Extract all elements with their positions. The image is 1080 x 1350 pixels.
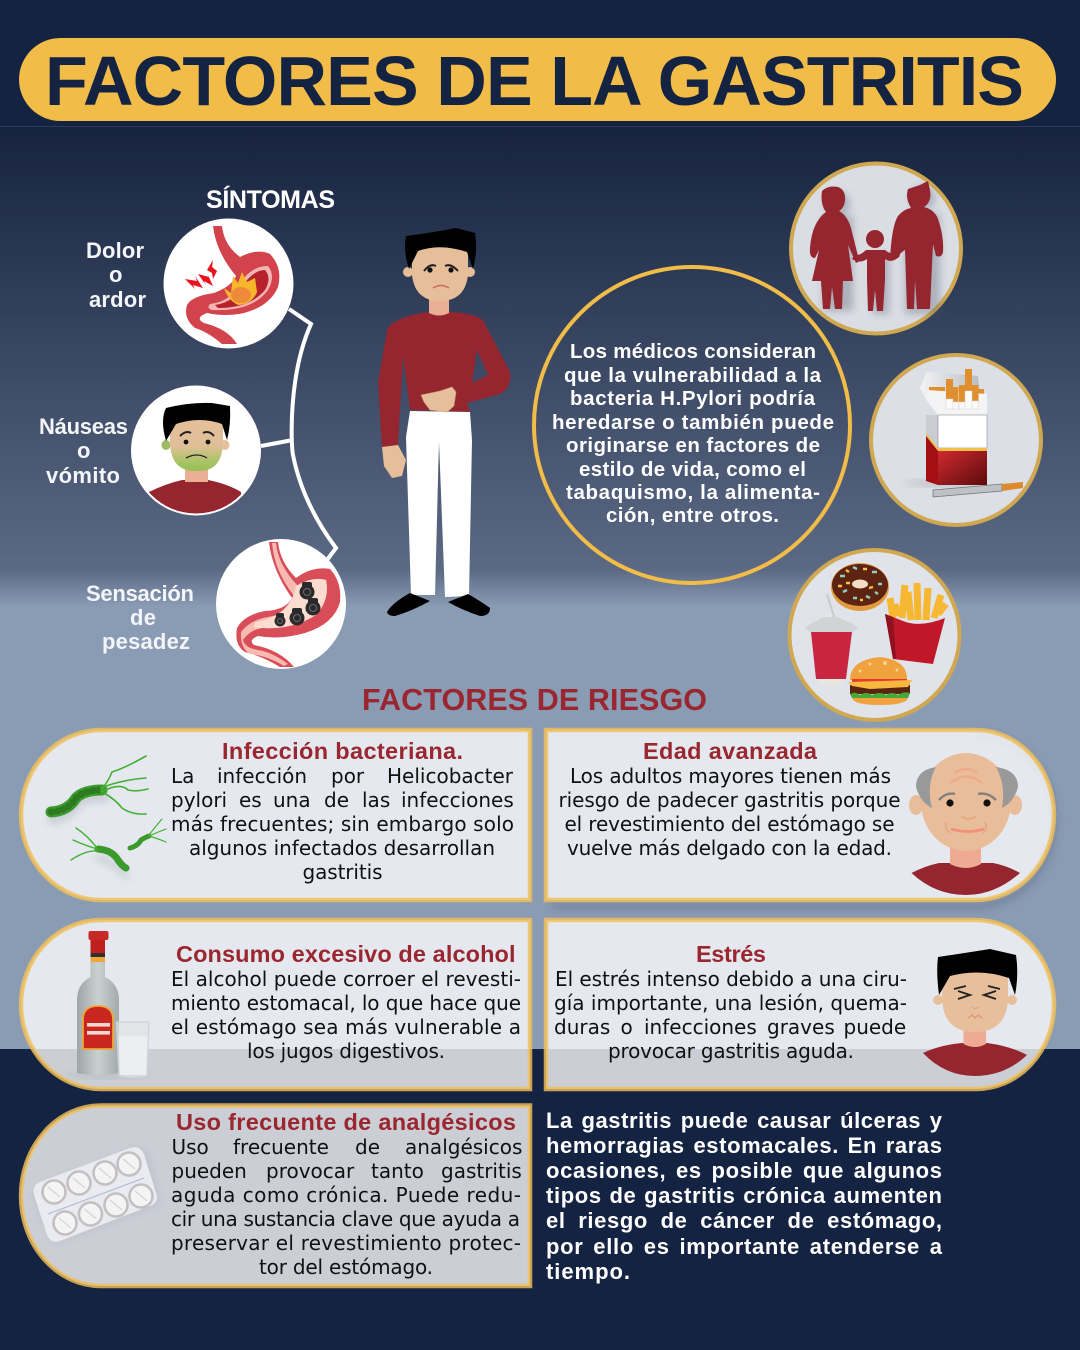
label: náuseas o vómito [39, 414, 128, 488]
text circle: explanation: bacteria H.Pylori podría [570, 387, 816, 410]
symptom: dolor o ardor [86, 218, 294, 348]
text block: de [355, 1135, 380, 1159]
panel: edad avanzada [546, 730, 1054, 900]
heading: Infección bacteriana. [222, 738, 463, 764]
text circle: explanation: ción, entre otros. [606, 504, 779, 527]
icon: family [791, 164, 961, 334]
text block: Los adultos mayores tienen más [570, 764, 891, 788]
label: sensación de pesadez: pesadez [102, 629, 190, 654]
text block: infecciones [401, 788, 514, 812]
panel: uso frecuente de analgésicos [21, 1106, 530, 1286]
icon: nauseous man [131, 386, 261, 516]
text block: puede [844, 1015, 906, 1039]
icon: junk food [790, 550, 960, 720]
text block: o [620, 1015, 633, 1039]
text block: riesgo de padecer gastritis porque [558, 788, 900, 812]
text block: el estómago sea más vulnerable a [171, 1015, 521, 1039]
label: náuseas o vómito: Náuseas [39, 414, 128, 439]
text block: Helicobacter [387, 764, 514, 788]
text block: algunos infectados desarrollan [189, 836, 495, 860]
text block: consequences: ocasiones, es posible que algunos [546, 1158, 942, 1183]
text circle: explanation: Los médicos consideran [570, 340, 816, 363]
text block: consequences: hemorragias estomacales. En raras [546, 1133, 942, 1158]
text block: graves [767, 1015, 835, 1039]
text block: provocar gastritis aguda. [608, 1039, 854, 1063]
panel: infección bacteriana [21, 730, 530, 900]
heading: Consumo excesivo de alcohol [176, 941, 516, 967]
text block: tanto [371, 1159, 424, 1183]
heading: Estrés [696, 941, 766, 967]
label: náuseas o vómito: vómito [46, 463, 120, 488]
text circle: explanation [534, 267, 850, 583]
text block: provocar [266, 1159, 355, 1183]
symptom: sensación de pesadez [86, 539, 346, 669]
text circle: explanation: que la vulnerabilidad a la [564, 364, 822, 387]
icon: bacteria [51, 756, 166, 876]
text block: una [273, 788, 311, 812]
label: dolor o ardor: Dolor [86, 238, 144, 263]
label: dolor o ardor [86, 238, 146, 312]
label: sensación de pesadez: de [130, 605, 156, 630]
text block: analgésicos [405, 1135, 522, 1159]
text block: las [362, 788, 390, 812]
heading: Edad avanzada [643, 738, 818, 764]
label: sensación de pesadez [86, 581, 194, 654]
text block: de [324, 788, 349, 812]
text block: infecciones [644, 1015, 757, 1039]
text block: los jugos digestivos. [247, 1039, 445, 1063]
text block: consequences: por ello es importante atenderse a [546, 1234, 943, 1259]
text block: consequences: el riesgo de cáncer de estómago, [546, 1208, 942, 1233]
heading: Uso frecuente de analgésicos [176, 1109, 516, 1135]
panel: consumo excesivo de alcohol [21, 920, 530, 1089]
text block: vuelve más delgado con la edad. [567, 836, 892, 860]
text block: preservar el revestimiento protec- [171, 1231, 521, 1255]
icon: cigarettes [871, 355, 1041, 525]
title banner: FACTORES DE LA GASTRITIS [45, 42, 1024, 120]
text block: cir una sustancia clave que ayuda a [171, 1207, 520, 1231]
text block: miento estomacal, lo que hace que [171, 991, 521, 1015]
text block: El estrés intenso debido a una ciru- [555, 967, 907, 991]
icon: pills [34, 1147, 158, 1242]
text block: duras [554, 1015, 610, 1039]
text block: consequences: tiempo. [546, 1259, 630, 1284]
text circle: explanation: originarse en factores de [566, 434, 820, 457]
text block: pylori [171, 788, 227, 812]
text circle: explanation: heredarse o también puede [552, 411, 834, 434]
text circle: explanation: estilo de vida, como el [579, 458, 806, 481]
text block: infección [217, 764, 307, 788]
symptom: náuseas o vómito [39, 386, 261, 516]
heading: factores de riesgo: FACTORES DE RIESGO [362, 683, 707, 717]
text block: gastritis [302, 860, 382, 884]
icon: burning stomach [164, 218, 294, 348]
text block: más frecuentes; sin embargo solo [171, 812, 514, 836]
text block: frecuente [233, 1135, 329, 1159]
panel: estrés [546, 920, 1054, 1089]
text block [554, 967, 907, 1063]
text block: el revestimiento del estómago se [564, 812, 894, 836]
text block: La [171, 764, 194, 788]
text block: tor del estómago. [259, 1255, 433, 1279]
text block: consequences [546, 1108, 943, 1284]
text block: gía importante, una lesión, quema- [554, 991, 907, 1015]
heading: síntomas: SÍNTOMAS [206, 185, 335, 214]
label: sensación de pesadez: Sensación [86, 581, 194, 606]
label: náuseas o vómito: o [77, 438, 90, 463]
text block: consequences: tipos de gastritis crónica aumenten [546, 1183, 942, 1208]
text block: consequences: La gastritis puede causar úlceras y [546, 1108, 943, 1133]
figure: man holding his stomach [378, 228, 510, 616]
icon: heavy stomach with weights [216, 539, 346, 669]
text circle: explanation: tabaquismo, la alimenta- [566, 481, 820, 504]
icon: older man [909, 753, 1022, 895]
label: dolor o ardor: o [109, 262, 122, 287]
shadow: edad avanzada panel [552, 736, 1054, 906]
text block [171, 764, 514, 884]
text block: gastritis [441, 1159, 522, 1183]
icon: bottle and glass [66, 931, 150, 1078]
text block [171, 967, 521, 1063]
text block: pueden [172, 1159, 247, 1183]
text block: por [331, 764, 365, 788]
text block [171, 1135, 522, 1279]
text block: El alcohol puede corroer el revesti- [171, 967, 521, 991]
connector lines between symptoms [261, 309, 336, 560]
label: dolor o ardor: ardor [89, 287, 146, 312]
icon: stressed man [923, 949, 1027, 1076]
text block: es [239, 788, 262, 812]
text block: aguda como crónica. Puede redu- [171, 1183, 521, 1207]
text block: Uso [172, 1135, 209, 1159]
text block [558, 764, 900, 860]
